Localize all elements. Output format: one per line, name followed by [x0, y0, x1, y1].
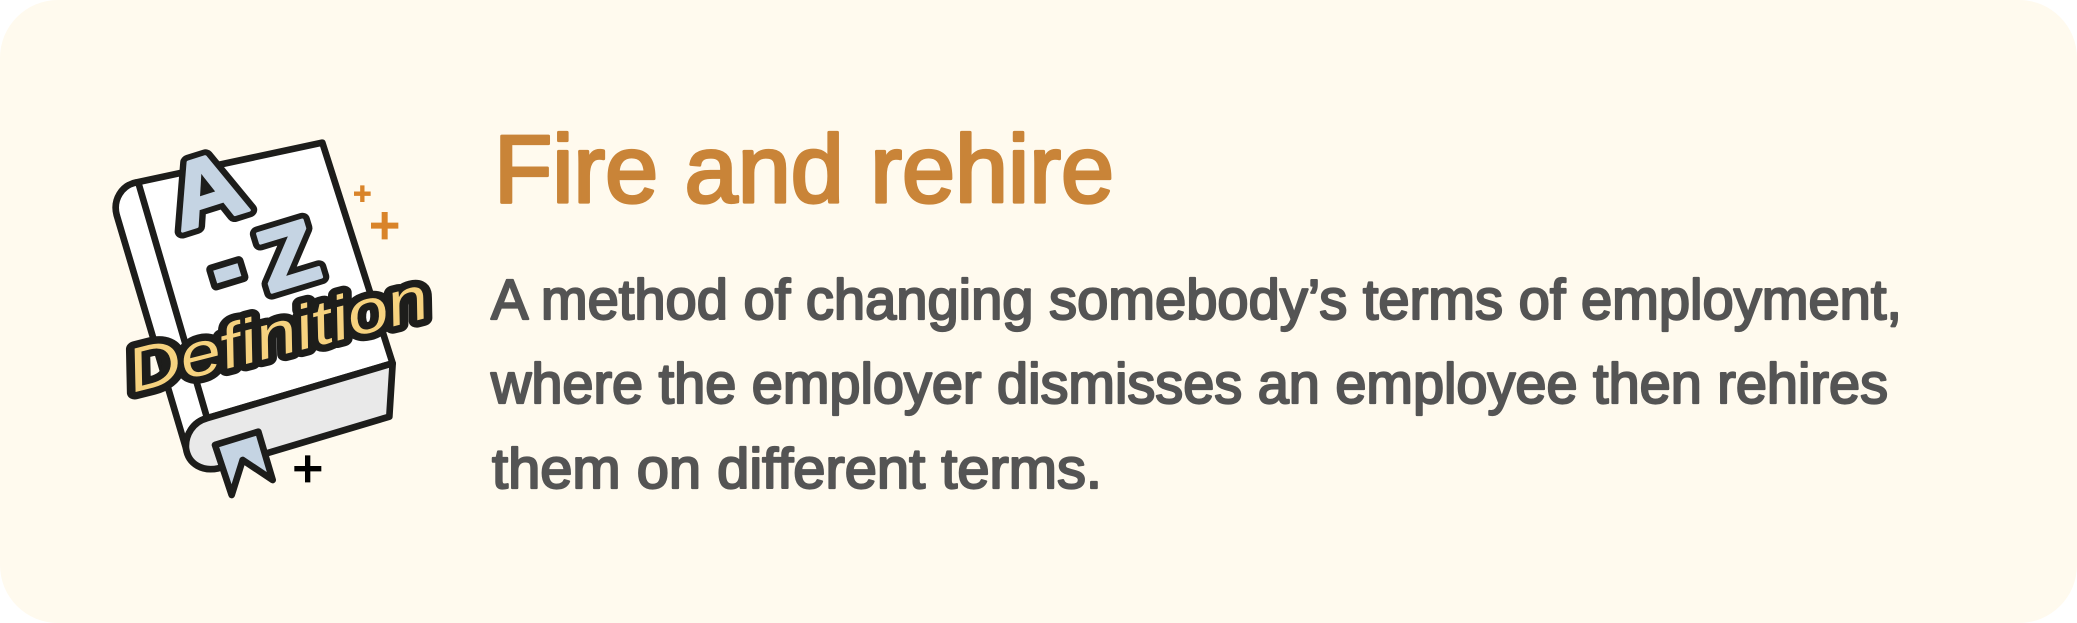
definition text block — [490, 268, 1902, 501]
bookmark ribbon — [215, 432, 273, 495]
definition text block: them on different terms. — [492, 437, 1102, 501]
icon: A-Z definition book — [116, 129, 436, 495]
script word: Definition: Definition — [120, 263, 436, 406]
book cover — [116, 143, 393, 448]
definition text block: A method of changing somebody’s terms of employment, — [491, 268, 1902, 332]
book spine line — [139, 185, 207, 417]
letter Z: Z — [246, 201, 330, 311]
title: Fire and rehire — [494, 116, 1114, 223]
letter A: A — [155, 129, 258, 251]
icon: small orange plus — [354, 185, 371, 202]
book page block — [186, 363, 393, 469]
letter A: A — [155, 129, 258, 251]
letter Z: Z — [246, 201, 330, 311]
icon: black plus — [294, 455, 321, 482]
definition text block: where the employer dismisses an employee then rehires — [490, 352, 1888, 416]
icon: large orange plus — [371, 212, 398, 239]
script word: Definition: Definition — [120, 263, 436, 406]
dash between letters — [209, 259, 246, 288]
